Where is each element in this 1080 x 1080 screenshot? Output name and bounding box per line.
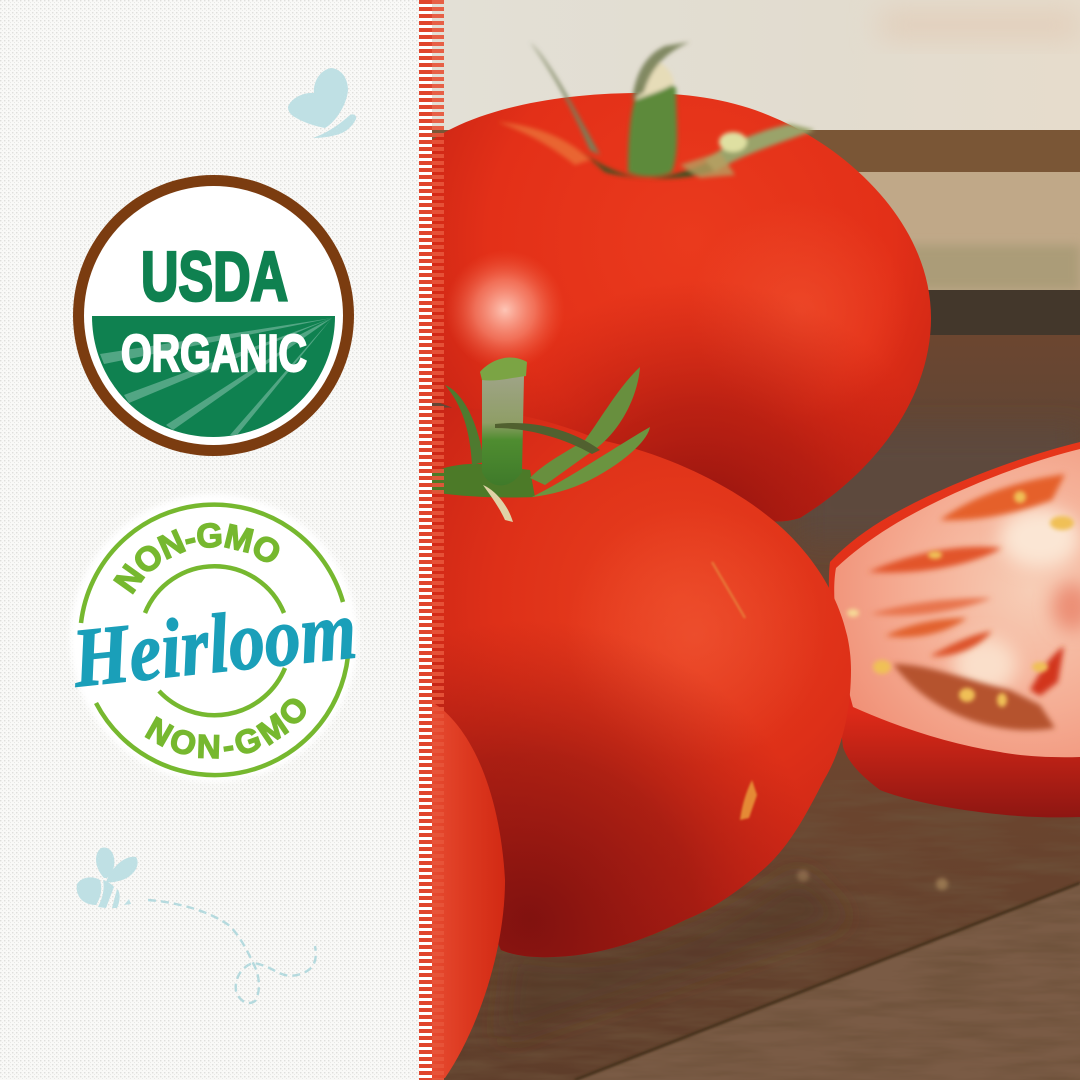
- text: NON-GMO top: NON-GMO: [112, 522, 280, 595]
- photo: tomatoes on a wooden board: [432, 0, 1080, 1080]
- photo background: wall and wooden table: [432, 0, 1080, 1080]
- badge text: ORGANIC: ORGANIC: [121, 325, 307, 383]
- decorative stripe band: [419, 0, 444, 1080]
- badge text: USDA: USDA: [141, 238, 288, 316]
- badge field: green half disc: [92, 316, 335, 437]
- icon: bee with dashed flight trail: [77, 847, 316, 1003]
- flight trail: [148, 900, 316, 1003]
- green outer and inner arcs: [81, 505, 348, 775]
- back tomato stem: [498, 42, 815, 178]
- text: NON-GMO bottom: NON-GMO: [144, 698, 306, 759]
- tomato: front: [432, 357, 851, 957]
- panel: linen background: [0, 0, 420, 1080]
- front tomato stem: [432, 357, 650, 522]
- cut tomato seed chambers: [847, 474, 1080, 730]
- tomato: bottom left: [432, 702, 505, 1080]
- tomato: back: [432, 42, 931, 522]
- icon: butterfly top right: [288, 68, 356, 138]
- icon: bee: [77, 847, 138, 908]
- badge: USDA Organic seal: [73, 175, 354, 456]
- text: Heirloom script: Heirloom: [68, 583, 361, 706]
- badge: Non-GMO Heirloom seal: [68, 492, 361, 783]
- tomato: cut slice: [829, 442, 1080, 817]
